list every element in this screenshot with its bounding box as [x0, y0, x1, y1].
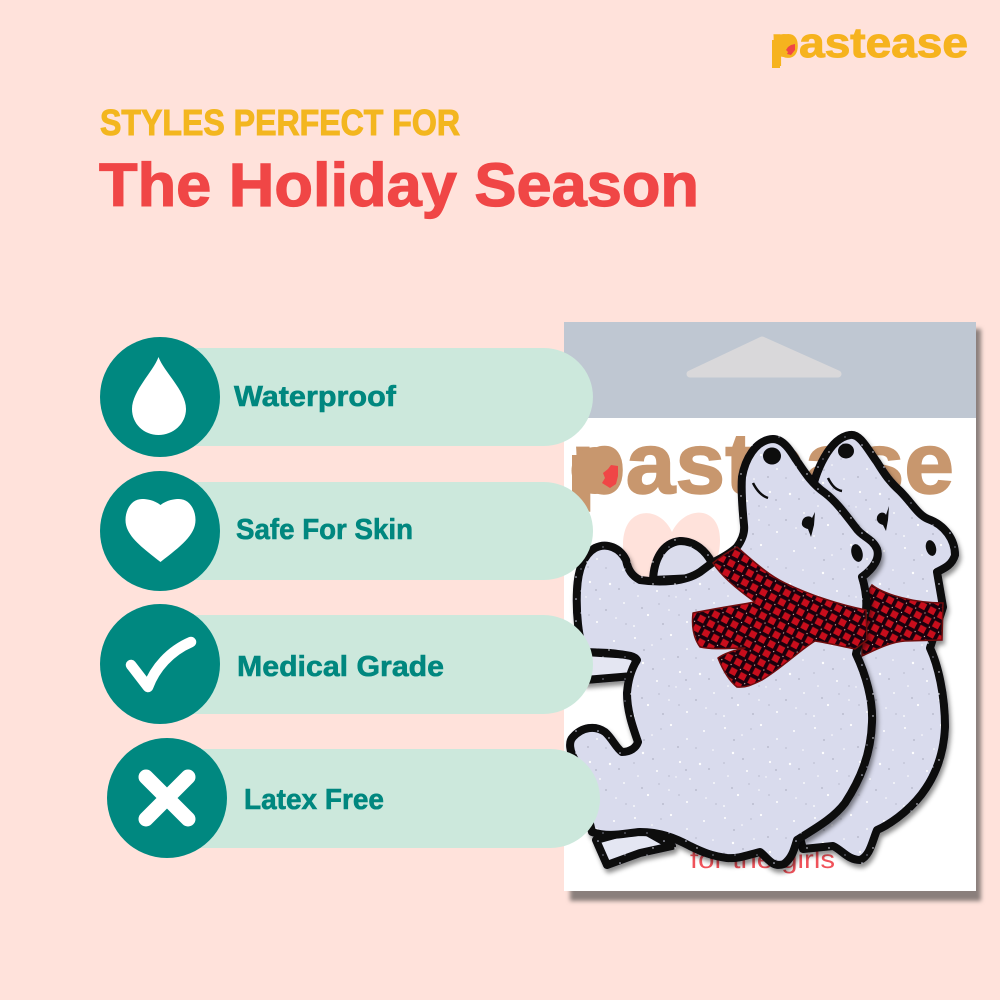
icon circle: [107, 738, 227, 858]
rear foot: [596, 828, 672, 865]
label: Safe For Skin: [236, 514, 413, 546]
mouth: [753, 483, 768, 498]
feature pill: safe for skin: [100, 471, 593, 591]
back eye: [877, 506, 889, 531]
eyebrow heading: STYLES PERFECT FOR: [100, 102, 460, 143]
icon: water drop: [132, 357, 186, 435]
card tagline: for the girls: [690, 844, 835, 874]
ear: [849, 543, 865, 563]
rear paw lower: [585, 652, 636, 680]
bear body: [570, 439, 878, 865]
nose: [763, 448, 781, 464]
label: Medical Grade: [237, 651, 444, 683]
rear paw upper: [653, 541, 712, 580]
icon circle: [100, 471, 220, 591]
feature pill: waterproof: [100, 337, 593, 457]
card heart: [623, 513, 720, 578]
product package card: [564, 322, 981, 901]
back scarf: [862, 585, 943, 656]
card hanger band: [564, 322, 976, 418]
pill background: [170, 348, 593, 446]
pill background: [177, 749, 600, 848]
scarf: [692, 547, 867, 687]
icon: check mark: [131, 642, 191, 687]
label: Latex Free: [244, 784, 384, 816]
icon: cross: [146, 777, 188, 819]
pill background: [170, 615, 593, 714]
polar bear pastie, back: [790, 435, 955, 860]
card shadow: [570, 329, 981, 901]
icon circle: [100, 337, 220, 457]
polar bear pastie, front: [570, 439, 878, 865]
feature pill: medical grade: [100, 604, 593, 724]
icon: heart: [126, 499, 196, 562]
hang hole: [690, 340, 838, 374]
back mouth: [828, 478, 842, 491]
eye: [802, 512, 815, 537]
label: Waterproof: [234, 381, 396, 413]
icon circle: [100, 604, 220, 724]
card white body: [564, 322, 976, 891]
pill background: [170, 482, 593, 580]
feature pill: latex free: [107, 738, 600, 858]
card logo: pastease: [571, 416, 954, 512]
brand logo: pastease: [771, 19, 968, 66]
main title: The Holiday Season: [99, 151, 699, 219]
back ear: [924, 539, 938, 557]
back nose: [838, 444, 854, 458]
